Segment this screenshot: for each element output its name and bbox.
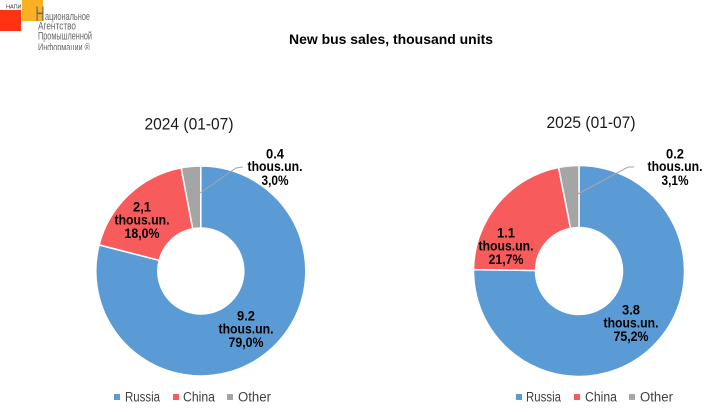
label: other 2024: 0.4 [266, 146, 284, 162]
chart: 2025 donut [474, 113, 702, 404]
label: china 2024: thous.un. [114, 212, 170, 228]
label: other 2025: 3,1% [662, 173, 688, 188]
logo: Н [36, 3, 44, 26]
logo [0, 0, 92, 54]
label: russia 2024 [218, 308, 274, 350]
label: russia 2024: thous.un. [218, 322, 274, 336]
label: china 2025 [478, 226, 534, 267]
legend 2025 [516, 390, 673, 404]
logo: ациональное [45, 11, 90, 23]
logo: НАПИ [6, 4, 22, 10]
label: other 2025: thous.un. [648, 159, 702, 174]
legend 2024 [114, 390, 271, 404]
donut rings 2025 [474, 166, 685, 376]
label: china 2024: 18,0% [124, 226, 160, 241]
label: china 2025: 21,7% [488, 252, 524, 267]
label: other 2024: thous.un. [248, 159, 302, 174]
legend 2024: Russia [125, 390, 160, 404]
label: russia 2025: 3.8 [622, 302, 640, 318]
label: china 2025: thous.un. [478, 238, 534, 254]
label: russia 2025 [604, 302, 658, 344]
label: russia 2025: thous.un. [604, 316, 658, 330]
label: other 2025 [648, 146, 702, 188]
label: china 2024: 2,1 [133, 200, 151, 214]
legend 2025: Russia [526, 390, 561, 404]
legend 2024: China [183, 390, 215, 404]
title: New bus sales, thousand units [289, 31, 493, 47]
label: china 2024 [114, 200, 170, 241]
logo: Промышленной [38, 30, 92, 42]
chart title 2024: 2024 (01-07) [144, 114, 234, 134]
chart title 2025: 2025 (01-07) [546, 113, 636, 132]
leader line 2024 [200, 167, 243, 193]
label: china 2025: 1.1 [497, 226, 515, 240]
logo: Агентство [38, 20, 76, 32]
leader line 2025 [578, 167, 634, 194]
label: russia 2024: 9.2 [237, 308, 255, 324]
label: russia 2025: 75,2% [614, 329, 648, 344]
label: other 2025: 0.2 [666, 146, 684, 162]
label: other 2024: 3,0% [262, 173, 288, 188]
legend 2024: Other [238, 390, 271, 404]
logo: Информации ® [38, 42, 90, 54]
donut rings 2024 [96, 166, 306, 376]
chart: 2024 donut [96, 114, 306, 404]
label: russia 2024: 79,0% [228, 335, 264, 350]
legend 2025: Other [640, 390, 673, 404]
label: other 2024 [248, 146, 302, 188]
legend 2025: China [585, 390, 617, 404]
